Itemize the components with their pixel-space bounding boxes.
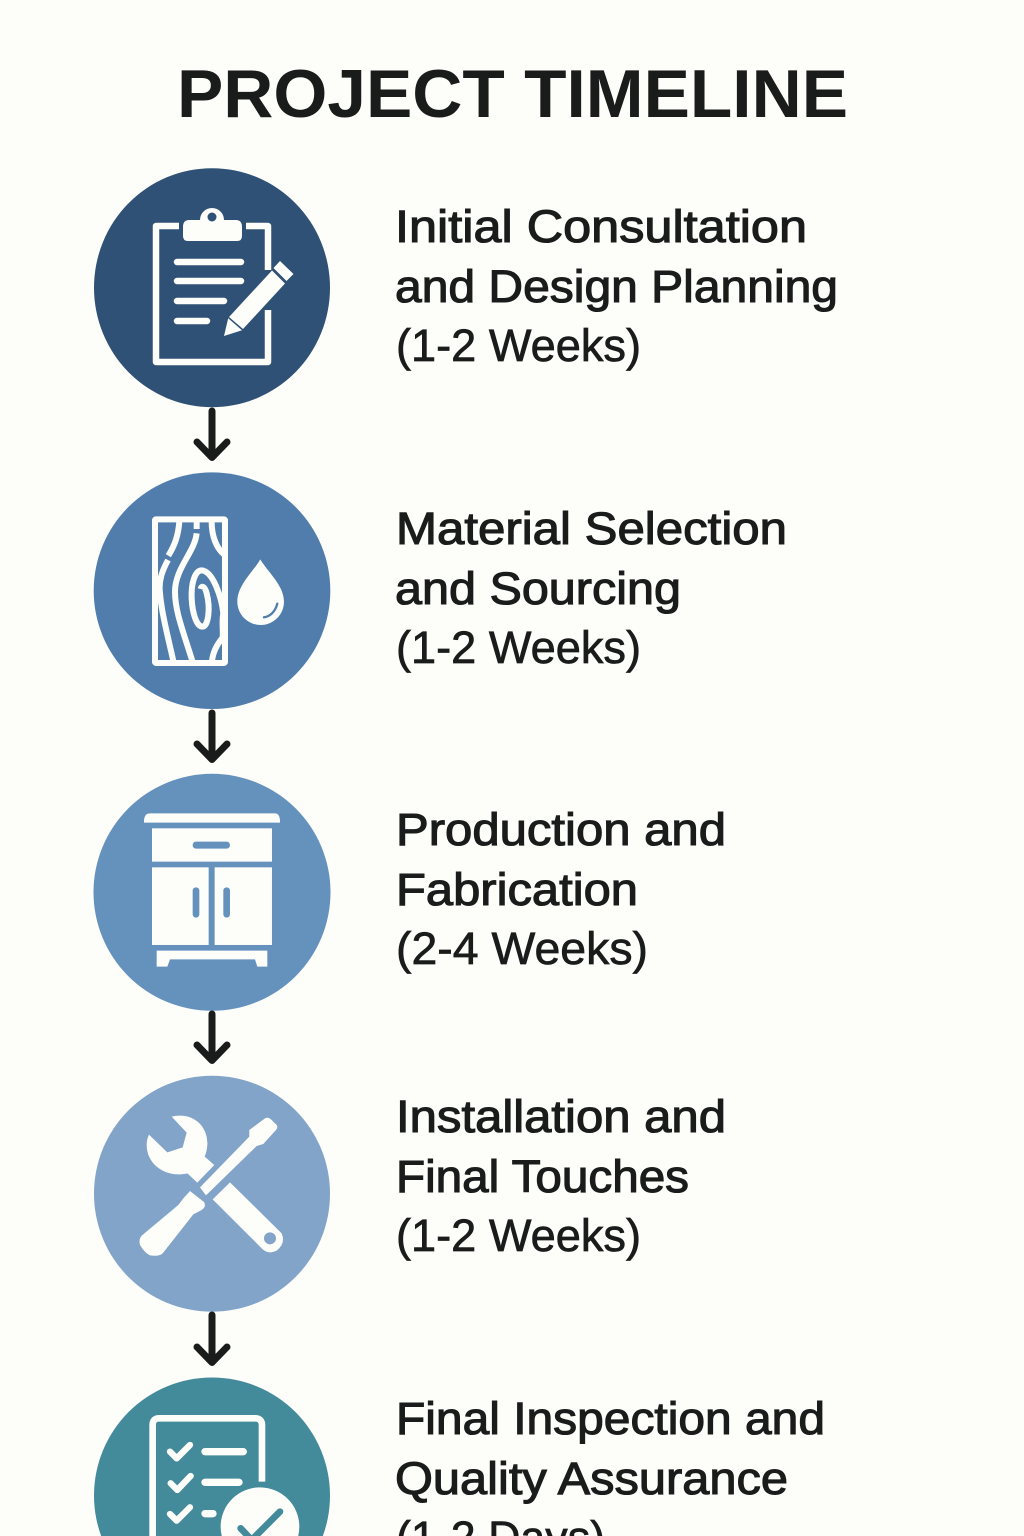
text: step 2 label: (1-2 Weeks) [396, 622, 641, 673]
step 5: final inspection [94, 1378, 825, 1536]
text: step 4 label: Final Touches [396, 1151, 689, 1202]
circle badge: step 3 [94, 774, 330, 1011]
text: step 4 label: (1-2 Weeks) [396, 1210, 641, 1261]
text: step 3 label [396, 804, 726, 974]
text: step 2 label: Material Selection [396, 503, 787, 554]
step 2: material selection [94, 472, 787, 709]
text: step 3 label: (2-4 Weeks) [396, 923, 648, 974]
text: step 2 label [395, 503, 787, 673]
icon: crossed wrench and screwdriver [139, 1116, 283, 1256]
arrow: step 1 to 2 [197, 411, 227, 458]
circle badge: step 2 [94, 472, 330, 709]
text: step 5 label [395, 1393, 825, 1536]
arrow: step 3 to 4 [197, 1014, 227, 1060]
arrow: step 2 to 3 [197, 713, 227, 760]
text: step 3 label: Fabrication [396, 864, 638, 915]
text: step 1 label [395, 201, 838, 371]
text: step 1 label: (1-2 Weeks) [396, 320, 641, 371]
circle badge: step 1 [94, 168, 330, 407]
icon: wood plank and water drop [155, 519, 284, 663]
step 4: installation [94, 1076, 726, 1312]
icon: cabinet [144, 813, 280, 967]
circle badge: step 4 [94, 1076, 330, 1312]
text: step 5 label: Quality Assurance [395, 1453, 788, 1504]
text: step 4 label [396, 1091, 726, 1261]
step 1: initial consultation [94, 168, 838, 407]
icon: clipboard with pencil [156, 208, 294, 362]
title: PROJECT TIMELINE [177, 56, 848, 132]
step 3: production [94, 774, 726, 1011]
icon: checklist with check badge [153, 1418, 299, 1536]
text: step 2 label: and Sourcing [395, 563, 681, 614]
text: step 5 label: Final Inspection and [396, 1393, 825, 1444]
circle badge: step 5 [94, 1378, 330, 1536]
text: step 3 label: Production and [396, 804, 726, 855]
text: step 1 label: and Design Planning [395, 261, 838, 312]
arrow: step 4 to 5 [197, 1315, 227, 1362]
text: step 4 label: Installation and [396, 1091, 726, 1142]
text: step 1 label: Initial Consultation [395, 201, 807, 252]
